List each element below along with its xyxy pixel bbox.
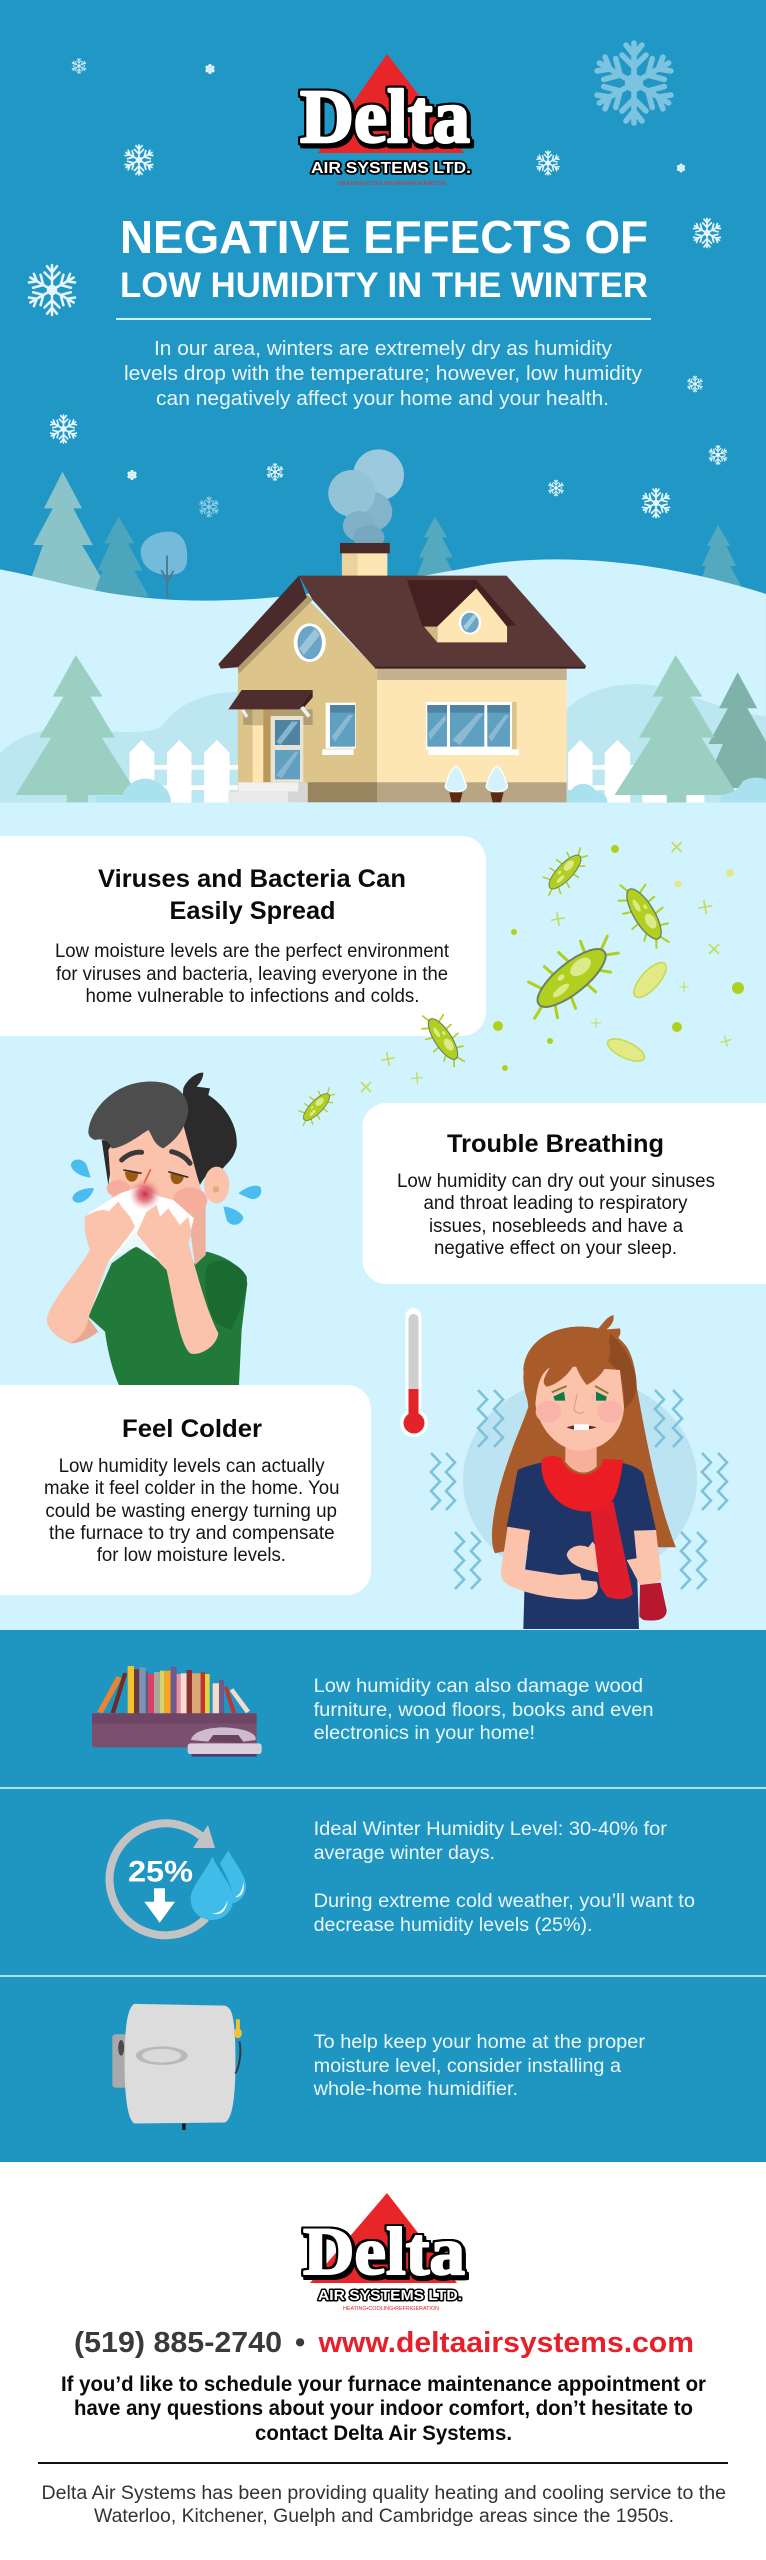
- panel: trouble breathing card: [362, 1103, 766, 1284]
- panel: ideal humidity level: During extreme cold weather, you’ll want to: [314, 1891, 695, 1912]
- panel: feel colder card: could be wasting energy turning up: [45, 1501, 337, 1522]
- panel: ideal humidity level: [0, 1789, 766, 1976]
- logo: Delta Air Systems footer: AIR SYSTEMS LTD.: [318, 2287, 462, 2304]
- phone and website: [74, 2327, 694, 2359]
- house upper structure: [218, 543, 586, 802]
- phone and website: www.deltaairsystems.com: [317, 2327, 694, 2359]
- panel: trouble breathing card: Trouble Breathing: [447, 1130, 664, 1158]
- panel: trouble breathing card: and throat leading to respiratory: [424, 1193, 688, 1214]
- call to action text: have any questions about your indoor comfort, don’t hesitate to: [74, 2397, 693, 2420]
- intro text block: [124, 338, 642, 410]
- icon: books and telephone: [92, 1666, 262, 1757]
- logo: Delta Air Systems header: AIR SYSTEMS LTD.: [311, 160, 471, 177]
- panel: home damage: Low humidity can also damage wood: [314, 1676, 643, 1697]
- picket fence: [129, 740, 766, 803]
- panel: whole-home humidifier: whole-home humidifier.: [313, 2079, 518, 2100]
- panel: home damage: furniture, wood floors, books and even: [314, 1700, 654, 1721]
- call to action text: contact Delta Air Systems.: [255, 2422, 512, 2445]
- snowflakes: [27, 43, 728, 518]
- panel: home damage: [0, 1630, 766, 1787]
- illustration: man with nosebleed: [47, 1073, 261, 1385]
- distant pale hills: [0, 684, 766, 803]
- company description: [42, 2483, 726, 2527]
- logo: Delta Air Systems footer: Delta: [303, 2213, 465, 2289]
- hands and arms: [47, 1202, 135, 1343]
- panel: whole-home humidifier: To help keep your home at the proper: [314, 2032, 646, 2053]
- logo: Delta Air Systems header: [300, 54, 471, 187]
- front hair: [88, 1082, 188, 1148]
- logo: Delta Air Systems footer: [303, 2193, 465, 2312]
- panel: feel colder card: [0, 1385, 371, 1595]
- logo: Delta Air Systems header: Delta: [300, 75, 470, 159]
- intro text block: In our area, winters are extremely dry as humidity: [154, 338, 612, 360]
- illustration: snowy house scene: [0, 449, 766, 820]
- panel: winter header background: [0, 0, 766, 830]
- shirt: [88, 1247, 247, 1385]
- panel: feel colder card: Feel Colder: [122, 1415, 262, 1443]
- panel: feel colder card: Low humidity levels can actually: [59, 1456, 325, 1477]
- phone and website: (519) 885-2740: [74, 2327, 282, 2359]
- intro text block: levels drop with the temperature; however, low humidity: [124, 363, 642, 385]
- face: [108, 1125, 203, 1227]
- hair back: [180, 1073, 237, 1185]
- intro text block: can negatively affect your home and your health.: [156, 388, 609, 410]
- panel: whole-home humidifier: [0, 1977, 766, 2162]
- panel: viruses card: Low moisture levels are the perfect environment: [55, 941, 450, 962]
- company description: Delta Air Systems has been providing quality heating and cooling service to the: [42, 2483, 726, 2504]
- title: LOW HUMIDITY IN THE WINTER: [120, 266, 648, 305]
- house lower details: [228, 690, 567, 802]
- cold shiver lines: [431, 1390, 727, 1589]
- panel: ideal humidity level: Ideal Winter Humidity Level: 30-40% for: [314, 1819, 668, 1840]
- tissue: [88, 1187, 194, 1270]
- panel: viruses card: Easily Spread: [170, 897, 336, 925]
- tears: [71, 1159, 261, 1225]
- panel: whole-home humidifier: moisture level, consider installing a: [314, 2056, 621, 2077]
- panel: health effects background: [0, 802, 766, 1630]
- panel: ideal humidity level: average winter days.: [314, 1843, 495, 1864]
- logo: Delta Air Systems footer: HEATING•COOLING•REFRIGERATION: [343, 2306, 439, 2312]
- panel: trouble breathing card: Low humidity can dry out your sinuses: [397, 1171, 715, 1192]
- call to action text: [61, 2373, 706, 2445]
- panel: trouble breathing card: issues, nosebleeds and have a: [429, 1216, 683, 1237]
- title: NEGATIVE EFFECTS OF: [120, 211, 648, 263]
- call to action text: If you’d like to schedule your furnace maintenance appointment or: [61, 2373, 706, 2396]
- snow bushes: [97, 778, 766, 803]
- background trees: [27, 472, 743, 598]
- panel: feel colder card: for low moisture levels.: [97, 1545, 286, 1566]
- logo: Delta Air Systems header: HEATING•COOLING•REFRIGERATION: [338, 181, 446, 187]
- icon: humidity dial with drops: [110, 1823, 246, 1935]
- panel: viruses card: Viruses and Bacteria Can: [98, 865, 406, 893]
- foreground trees: [16, 655, 766, 803]
- snow hill: [0, 559, 766, 820]
- phone and website: •: [295, 2327, 305, 2359]
- panel: feel colder card: the furnace to try and compensate: [49, 1523, 335, 1544]
- panel: home damage: electronics in your home!: [314, 1723, 535, 1744]
- panel: feel colder card: make it feel colder in the home. You: [44, 1478, 340, 1499]
- panel: trouble breathing card: negative effect on your sleep.: [434, 1238, 677, 1259]
- company description: Waterloo, Kitchener, Guelph and Cambridge areas since the 1950s.: [94, 2506, 674, 2527]
- illustration: bacteria cluster: [292, 842, 744, 1131]
- chimney smoke: [328, 449, 404, 549]
- icon: humidity dial with drops: 25%: [128, 1856, 193, 1889]
- icon: thermometer: [400, 1308, 428, 1437]
- icon: humidifier: [112, 2004, 242, 2130]
- panel: viruses card: home vulnerable to infections and colds.: [86, 986, 420, 1007]
- panel: viruses card: for viruses and bacteria, leaving everyone in the: [56, 964, 448, 985]
- panel: viruses card: [0, 836, 486, 1036]
- panel: ideal humidity level: decrease humidity levels (25%).: [314, 1915, 592, 1936]
- title: [120, 211, 648, 305]
- illustration: shivering girl: [431, 1315, 727, 1629]
